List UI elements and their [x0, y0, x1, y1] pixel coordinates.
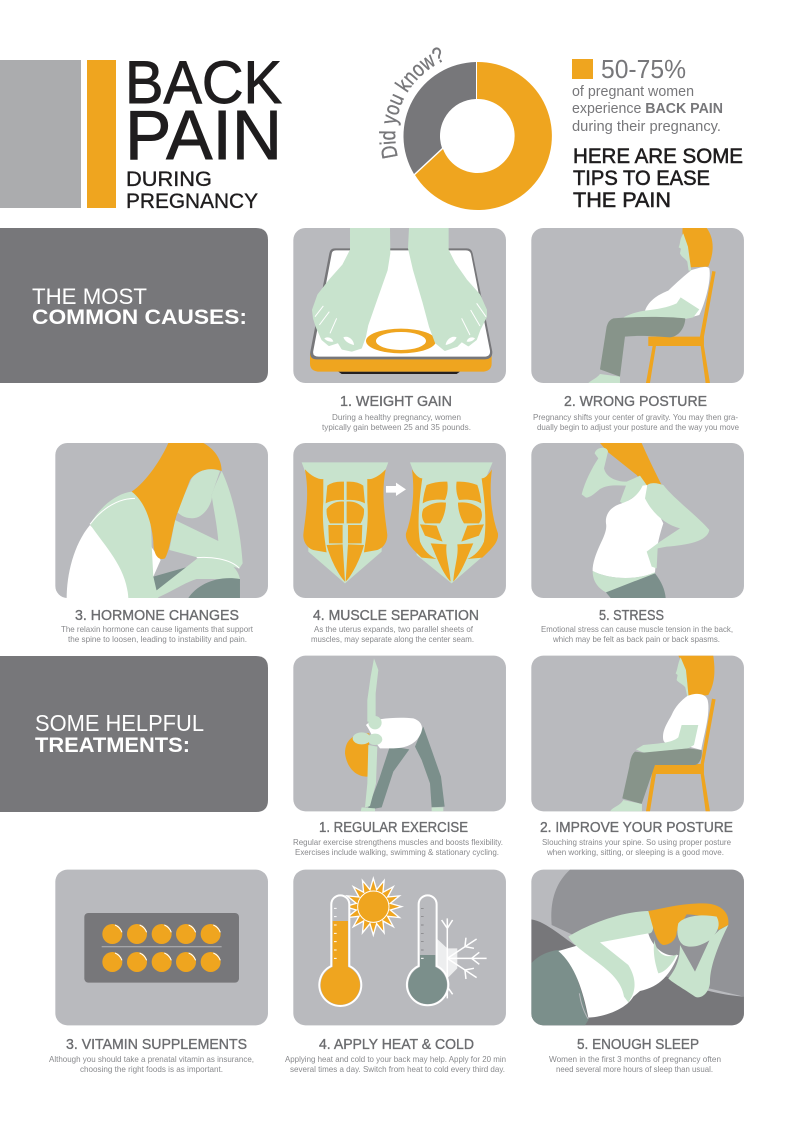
caption: hormone changes	[61, 624, 254, 644]
icon: blister pack	[84, 913, 239, 983]
heading: improve posture: 2. IMPROVE YOUR POSTURE	[540, 820, 733, 836]
caption: improve posture: when working, sitting, or sleeping is a good move.	[546, 847, 724, 857]
title: PREGNANCY	[126, 190, 258, 213]
caption: apply heat and cold	[285, 1054, 506, 1074]
header block: grey bar	[0, 60, 81, 208]
heading: enough sleep: 5. ENOUGH SLEEP	[577, 1037, 699, 1053]
title: DURING	[126, 168, 212, 191]
panel: wrong posture	[531, 228, 744, 383]
caption: improve posture	[542, 837, 731, 857]
icon: chair	[646, 271, 716, 383]
caption: improve posture: Slouching strains your spine. So using proper posture	[542, 837, 731, 847]
icon: chair	[646, 699, 716, 811]
caption: regular exercise: Regular exercise strengthens muscles and boosts flexibility.	[293, 837, 503, 847]
heading: hormone changes: 3. HORMONE CHANGES	[75, 608, 239, 624]
caption: muscle separation: muscles, may separate along the center seam.	[311, 634, 474, 644]
heading: vitamin supplements: 3. VITAMIN SUPPLEMENTS	[66, 1037, 247, 1053]
panel: common causes banner: COMMON CAUSES:	[32, 306, 247, 329]
donut chart	[403, 62, 552, 210]
caption: weight gain: typically gain between 25 and 35 pounds.	[322, 422, 471, 432]
heading: weight gain: 1. WEIGHT GAIN	[340, 394, 452, 410]
figure: upright woman	[610, 656, 714, 811]
pillow	[551, 870, 744, 997]
icon: right foot	[409, 228, 486, 350]
panel: apply heat and cold	[293, 870, 506, 1025]
arrow: expansion	[386, 483, 406, 496]
panel: common causes banner	[0, 228, 268, 383]
panel: improve posture	[531, 656, 744, 811]
panel: enough sleep	[531, 870, 744, 1025]
panel: helpful treatments banner: SOME HELPFUL	[35, 710, 204, 736]
panel: weight gain	[293, 228, 506, 383]
caption: wrong posture	[533, 412, 739, 432]
caption: vitamin supplements: choosing the right foods is as important.	[80, 1064, 223, 1074]
stat description	[572, 84, 723, 135]
figure: slouched woman	[588, 228, 713, 383]
mattress	[531, 919, 744, 1025]
panel: helpful treatments banner: TREATMENTS:	[35, 734, 190, 757]
caption: regular exercise: Exercises include walking, swimming & stationary cycling.	[295, 847, 499, 857]
diagram: normal abdominal muscles	[302, 462, 388, 583]
heading: muscle separation: 4. MUSCLE SEPARATION	[313, 608, 479, 624]
caption: enough sleep: need several more hours of sleep than usual.	[556, 1064, 713, 1074]
figure: woman holding head	[67, 443, 243, 598]
caption: stress	[541, 624, 733, 644]
donut: 50-75 percent orange segment	[415, 62, 552, 210]
heading: stress: 5. STRESS	[599, 608, 664, 624]
title: PAIN	[125, 96, 282, 174]
heading: apply heat and cold: 4. APPLY HEAT & COLD	[319, 1037, 474, 1053]
caption: weight gain	[322, 412, 471, 432]
header block: orange bar	[87, 60, 116, 208]
panel: muscle separation	[293, 443, 506, 598]
panel: hormone changes	[55, 443, 268, 598]
caption: muscle separation	[311, 624, 474, 644]
caption: wrong posture: Pregnancy shifts your center of gravity. You may then gra-	[533, 412, 738, 422]
caption: wrong posture: dually begin to adjust your posture and the way you move	[537, 422, 739, 432]
caption: muscle separation: As the uterus expands, two parallel sheets of	[314, 624, 474, 634]
curved label: did you know: Did you know?	[379, 47, 442, 159]
caption: hormone changes: The relaxin hormone can cause ligaments that support	[61, 624, 254, 634]
stat description: experience BACK PAIN	[572, 101, 723, 117]
stat number: 50-75%	[601, 54, 686, 84]
caption: stress: which may be felt as back pain or back spasms.	[552, 634, 720, 644]
icon: left foot	[313, 228, 389, 351]
stat description: during their pregnancy.	[572, 119, 721, 135]
caption: hormone changes: the spine to loosen, leading to instability and pain.	[68, 634, 247, 644]
subheading: tips: TIPS TO EASE	[573, 167, 710, 190]
panel: vitamin supplements	[55, 870, 268, 1025]
figure: stretching woman	[345, 658, 445, 811]
statistic	[572, 54, 723, 135]
panel: common causes banner: THE MOST	[32, 284, 147, 309]
icon: sun	[345, 878, 402, 935]
caption: vitamin supplements: Although you should take a prenatal vitamin as insurance,	[49, 1054, 254, 1064]
caption: apply heat and cold: Applying heat and cold to your back may help. Apply for 20 min	[285, 1054, 506, 1064]
icon: snowflake	[437, 918, 487, 998]
title	[125, 49, 282, 213]
caption: enough sleep: Women in the first 3 months of pregnancy often	[549, 1054, 721, 1064]
stat marker square	[572, 59, 593, 79]
caption: weight gain: During a healthy pregnancy, women	[332, 412, 461, 422]
subheading: tips	[573, 145, 743, 212]
diagram: separated abdominal muscles	[406, 462, 498, 583]
caption: stress: Emotional stress can cause muscle tension in the back,	[541, 624, 733, 634]
title: BACK	[125, 49, 282, 116]
figure: stressed pregnant woman	[582, 443, 709, 598]
icon: bathroom scale	[310, 248, 492, 374]
stat description: of pregnant women	[572, 84, 694, 100]
caption: regular exercise	[293, 837, 503, 857]
panel: helpful treatments banner	[0, 656, 268, 812]
subheading: tips: HERE ARE SOME	[573, 145, 743, 168]
caption: apply heat and cold: several times a day. Switch from heat to cold every third day.	[290, 1064, 505, 1074]
heading: wrong posture: 2. WRONG POSTURE	[564, 394, 707, 410]
heading: regular exercise: 1. REGULAR EXERCISE	[319, 820, 468, 836]
caption: enough sleep	[549, 1054, 721, 1074]
icon: hot thermometer	[319, 895, 361, 1006]
donut: grey segment	[403, 62, 476, 174]
caption: vitamin supplements	[49, 1054, 254, 1074]
panel: regular exercise	[293, 656, 506, 811]
figure: sleeping woman	[531, 903, 728, 1025]
panel: stress	[531, 443, 744, 598]
icon: cold thermometer	[407, 895, 448, 1005]
subheading: tips: THE PAIN	[573, 189, 671, 212]
